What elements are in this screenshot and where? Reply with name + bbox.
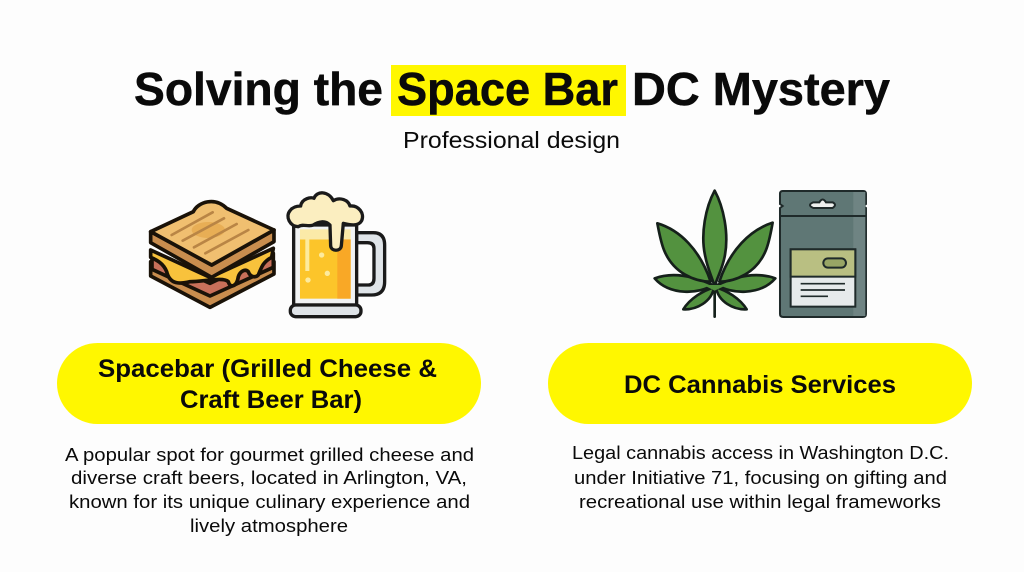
title bbox=[134, 63, 890, 116]
subtitle: Professional design bbox=[403, 127, 620, 153]
icon: grilled cheese sandwich bbox=[151, 202, 274, 307]
text block: cannabis description: under Initiative 71, focusing on gifting and bbox=[574, 468, 947, 488]
icon: beer mug bbox=[288, 193, 385, 317]
title: DC Mystery bbox=[632, 63, 890, 115]
title: Space Bar bbox=[397, 63, 618, 115]
icon: product package bbox=[780, 191, 866, 317]
text block: spacebar description: diverse craft beers, located in Arlington, VA, bbox=[71, 468, 467, 488]
text block: cannabis description: recreational use within legal frameworks bbox=[579, 492, 941, 512]
panel: DC cannabis label pill bbox=[548, 343, 972, 424]
text block: spacebar description: known for its unique culinary experience and bbox=[69, 492, 470, 512]
icon: cannabis leaf bbox=[655, 191, 775, 317]
panel: spacebar label pill: Craft Beer Bar) bbox=[180, 386, 362, 414]
title: Solving the bbox=[134, 63, 383, 115]
panel: DC cannabis label pill: DC Cannabis Services bbox=[624, 371, 896, 399]
text block: spacebar description: lively atmosphere bbox=[190, 516, 348, 536]
panel: spacebar label pill bbox=[57, 343, 481, 424]
panel: spacebar label pill: Spacebar (Grilled Cheese & bbox=[98, 355, 437, 383]
text block: cannabis description: Legal cannabis access in Washington D.C. bbox=[572, 443, 949, 463]
text block: spacebar description bbox=[65, 445, 474, 536]
text block: cannabis description bbox=[572, 443, 949, 512]
text block: spacebar description: A popular spot for gourmet grilled cheese and bbox=[65, 445, 474, 465]
